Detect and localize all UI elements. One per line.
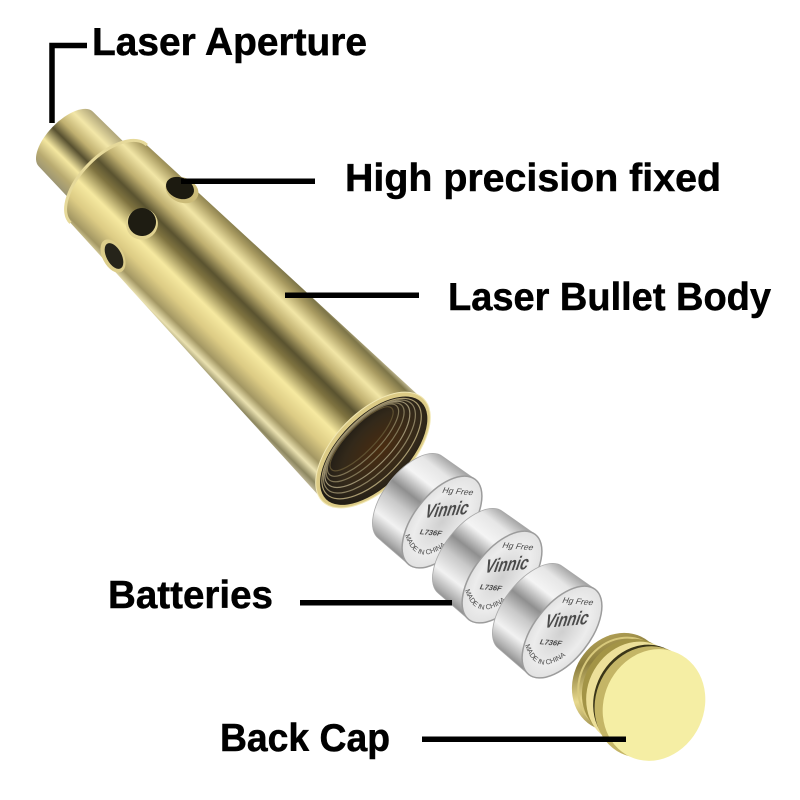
tube barrel [36, 117, 423, 501]
leader: laser aperture [52, 46, 87, 123]
label: Batteries: Batteries [108, 574, 273, 617]
part: back cap [554, 615, 723, 778]
cap face [585, 632, 723, 778]
part: battery 2: Hg Free [501, 540, 536, 552]
label: High precision fixed: High precision fixed [345, 157, 721, 200]
part: battery 2: Vinnic [482, 551, 533, 577]
label: Laser Bullet Body: Laser Bullet Body [448, 276, 771, 319]
nose tube [25, 99, 130, 204]
part: battery 1: L736F [418, 528, 444, 538]
part: battery 1: Vinnic [422, 496, 473, 522]
threaded interior [301, 378, 446, 523]
leader: laser bullet body [285, 292, 419, 298]
neck [568, 624, 700, 762]
part: battery 1: Hg Free [441, 485, 476, 497]
part: battery 3 [492, 563, 603, 679]
part: battery 3: L736F [538, 638, 564, 648]
part: laser bullet body [0, 80, 451, 528]
leader: back cap [422, 736, 626, 742]
label: Laser Aperture: Laser Aperture [92, 21, 367, 64]
part: battery 2 [432, 508, 543, 624]
part: battery 1 [372, 453, 483, 569]
part: battery 3: Hg Free [561, 595, 596, 607]
label: Back Cap: Back Cap [220, 717, 390, 760]
leader: batteries [300, 600, 452, 606]
part: battery 2: MADE IN CHINA [465, 589, 504, 610]
holes: high precision fixed screws [95, 172, 202, 277]
leader: high precision fixed [181, 178, 315, 184]
threaded stem [554, 615, 682, 749]
collar ring [51, 125, 147, 223]
part: battery 1: MADE IN CHINA [405, 534, 444, 555]
mouth rim [295, 372, 451, 528]
part: battery 3: MADE IN CHINA [525, 644, 566, 665]
part: battery 2: L736F [478, 583, 504, 593]
part: battery 3: Vinnic [542, 606, 593, 632]
